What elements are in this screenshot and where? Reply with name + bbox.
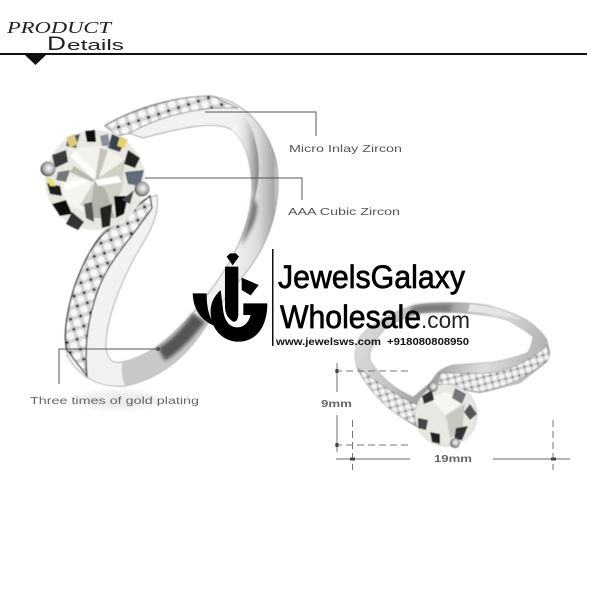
right prong — [134, 182, 150, 196]
heading: Details capital: D — [47, 34, 66, 55]
diamond star facets — [70, 145, 125, 180]
small ring — [355, 303, 550, 448]
dark shank accent — [158, 313, 205, 361]
lower pave strip — [65, 196, 152, 376]
measure dots — [336, 369, 338, 447]
callout: three times of gold plating — [30, 347, 199, 407]
left prong — [40, 162, 56, 176]
header rule — [0, 53, 587, 55]
small ring band — [355, 303, 550, 427]
callout: AAA cubic zircon — [145, 178, 400, 218]
logo upper wedge — [242, 278, 259, 295]
brand wordmark — [275, 259, 470, 348]
horizontal measure — [336, 458, 570, 460]
header pointer triangle — [25, 55, 46, 65]
JewelsGalaxy: JewelsGalaxy — [278, 259, 465, 295]
small ring light top highlight — [468, 304, 522, 320]
19mm label: 19mm — [434, 454, 472, 465]
small ring pave left — [358, 368, 418, 426]
callout: micro inlay zircon — [205, 112, 402, 155]
.com: .com — [421, 307, 470, 333]
small ring pave right — [438, 345, 549, 392]
brand logo: JG monogram — [193, 253, 267, 342]
leader line — [59, 349, 158, 384]
main diamond — [40, 130, 150, 230]
dimension: 9mm height — [321, 363, 408, 452]
logo J stem — [225, 267, 238, 322]
bottom prong — [450, 438, 460, 448]
Wholesale: Wholesale — [280, 299, 421, 335]
heading: Details rest: etails — [67, 37, 124, 54]
icon: diamond — [227, 253, 239, 265]
logo divider — [272, 249, 274, 346]
label: Three times of gold plating — [30, 395, 199, 407]
dashed guides — [352, 420, 553, 470]
phone: +918080808950 — [387, 336, 469, 348]
label: AAA Cubic Zircon — [288, 206, 400, 218]
top prong — [428, 382, 438, 392]
inner shank dark reflection — [241, 197, 257, 246]
heading: PRODUCT: PRODUCT — [6, 18, 113, 37]
vertical measure — [336, 363, 338, 452]
ring band — [65, 96, 278, 386]
measure dots — [350, 458, 556, 460]
main ring — [40, 96, 278, 409]
leader dot — [156, 347, 160, 351]
inner shank shading — [232, 116, 259, 207]
label: Micro Inlay Zircon — [289, 143, 402, 155]
small ring dark reflection — [408, 304, 452, 316]
small diamond — [415, 382, 477, 448]
leader line — [205, 112, 316, 136]
diamond dark facets — [85, 130, 96, 142]
logo left wedge — [193, 293, 215, 326]
leader line — [145, 178, 302, 200]
dashed guides — [335, 371, 408, 445]
reflection under main ring — [76, 391, 160, 409]
lower shank shadow — [122, 313, 208, 386]
9mm label: 9mm — [321, 399, 352, 410]
header: product details — [0, 18, 587, 65]
website: www.jewelsws.com — [275, 336, 381, 348]
upper pave strip — [105, 96, 238, 136]
logo G bowl — [211, 290, 267, 342]
dimension: 19mm width — [336, 420, 570, 470]
